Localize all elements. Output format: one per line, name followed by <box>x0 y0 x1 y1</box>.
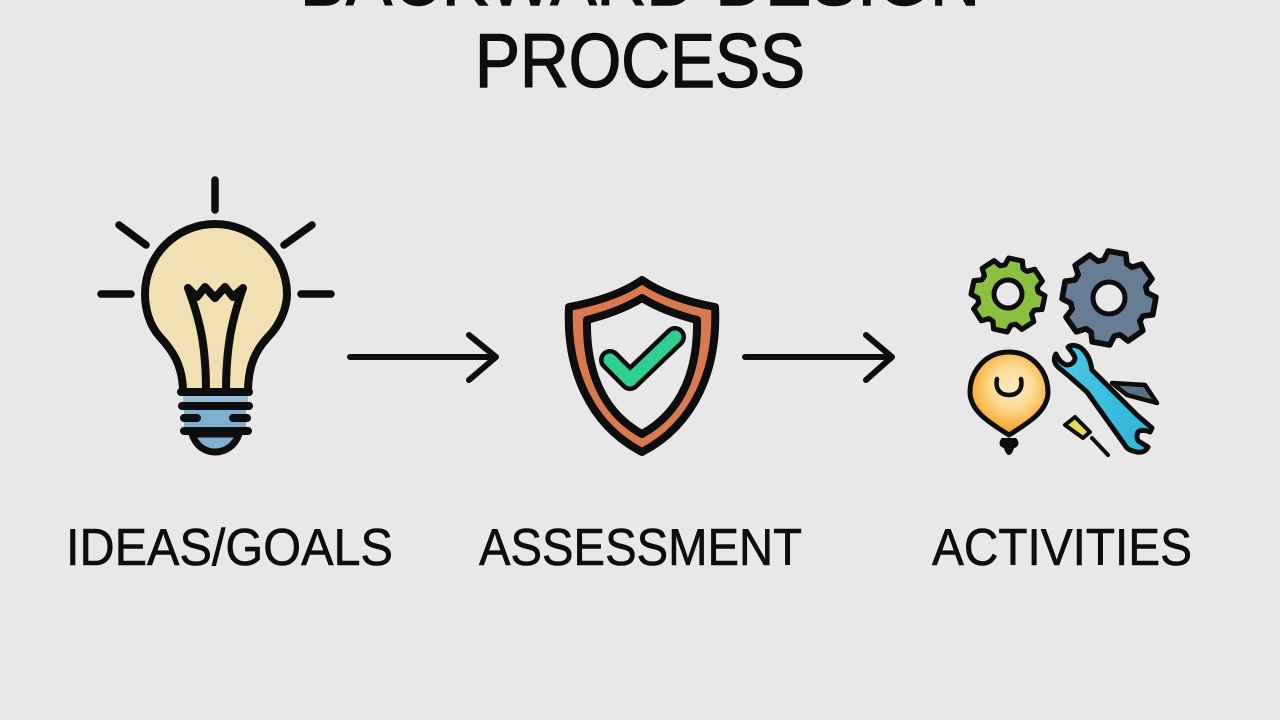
icon: balloon bulb <box>970 352 1048 455</box>
icon: light bulb <box>101 180 331 452</box>
title: PROCESS <box>475 19 805 104</box>
title <box>300 0 980 104</box>
icon: blade <box>1112 383 1157 403</box>
icon: wrench <box>1054 345 1152 452</box>
arrow: goals to assessment <box>350 335 496 380</box>
icon: activities tools <box>965 245 1162 455</box>
arrow: assessment to activities <box>745 335 892 380</box>
label: activities: ACTIVITIES <box>932 519 1192 577</box>
icon: shield with check <box>569 280 715 452</box>
label: assessment: ASSESSMENT <box>479 519 802 577</box>
icon: small screwdriver <box>1065 417 1108 455</box>
icon: green gear <box>965 252 1051 338</box>
label: ideas and goals: IDEAS/GOALS <box>66 519 393 577</box>
icon: grey gear <box>1056 245 1162 351</box>
